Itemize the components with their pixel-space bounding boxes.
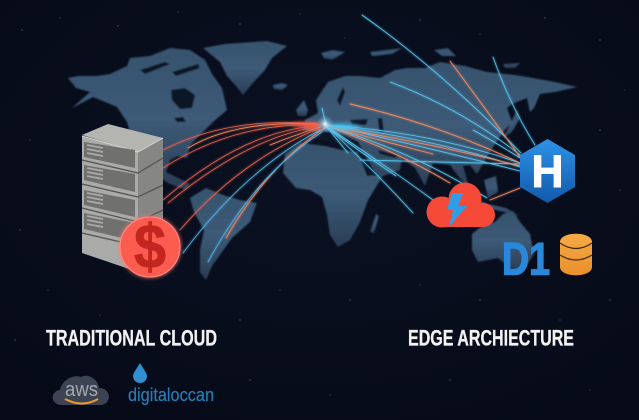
- dollar coin icon: $: [134, 213, 166, 282]
- heading: edge architecture: EDGE ARCHIECTURE: [408, 326, 574, 350]
- server rack: [82, 124, 163, 272]
- digitalocean logo: digitaloccan: [128, 385, 214, 405]
- Madagascar: [370, 214, 379, 233]
- rack top face: [82, 124, 163, 152]
- drive unit dividers: [82, 158, 163, 246]
- rack body left face: [82, 136, 138, 272]
- blue routes: [183, 130, 322, 262]
- aws logo: aws: [65, 379, 98, 401]
- top edge highlight: [82, 136, 163, 152]
- Japan: [504, 110, 520, 137]
- D1 database logo: D1: [502, 234, 550, 284]
- Iceland: [273, 83, 288, 90]
- Arctic islands: [370, 48, 520, 68]
- British Isles: [296, 100, 308, 116]
- heading: traditional cloud: TRADITIONAL CLOUD: [46, 326, 217, 350]
- drive panels: [84, 142, 135, 241]
- South America: [190, 188, 257, 280]
- Indonesia islands: [470, 196, 520, 216]
- aws logo: [53, 376, 109, 405]
- Borneo and Philippines: [484, 176, 498, 198]
- connection lines: edge architecture: [322, 15, 535, 213]
- digitalocean logo: [128, 363, 214, 405]
- red routes: [163, 122, 320, 230]
- inland seas and lakes: [140, 62, 397, 176]
- Greenland: [203, 41, 287, 95]
- North America: [68, 48, 227, 190]
- Hyperdrive hexagon icon: H: [532, 146, 564, 197]
- dollar coin icon: [120, 213, 180, 282]
- world map: [68, 41, 577, 280]
- network hub glow: [292, 115, 360, 133]
- Hyperdrive hexagon icon: [520, 139, 575, 203]
- blue routes: [322, 15, 535, 213]
- D1 database logo: [502, 234, 592, 284]
- edge cloud lightning icon: [426, 182, 495, 228]
- orange routes: [188, 124, 326, 238]
- Australia: [472, 211, 534, 270]
- Africa: [283, 143, 382, 247]
- Eurasia: [303, 62, 577, 190]
- orange routes: [326, 61, 520, 200]
- database cylinder icon: [560, 234, 592, 275]
- land masses: [68, 41, 577, 280]
- drive vents: [87, 145, 103, 227]
- connection lines: traditional cloud: [163, 122, 326, 262]
- Svalbard: [321, 50, 345, 60]
- rack body right face: [138, 138, 163, 272]
